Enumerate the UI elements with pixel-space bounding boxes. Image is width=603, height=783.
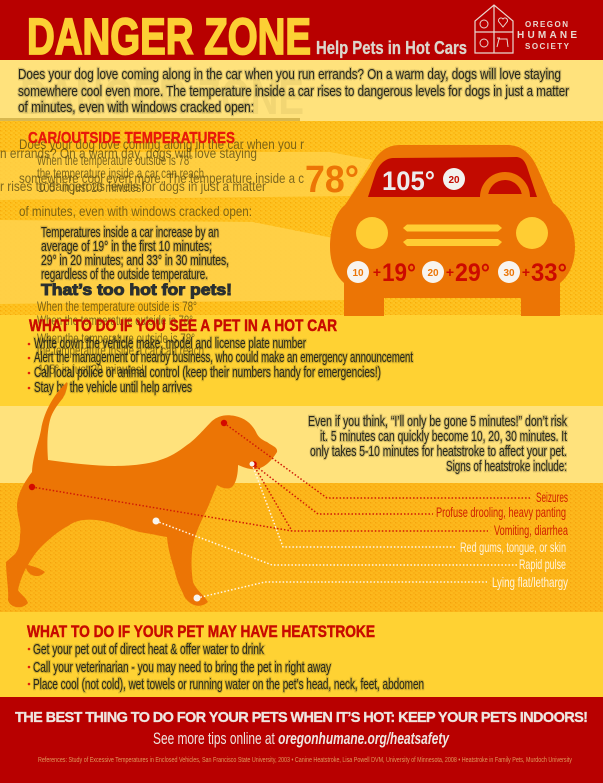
text block: temperature increase: average of 19° in the first 10 minutes; — [41, 239, 212, 255]
logo: Oregon Humane Society — [475, 5, 577, 53]
list: hot car actions: Write down the vehicle make, model and license plate number — [34, 336, 306, 352]
list: hot car actions — [28, 336, 413, 396]
list: hot car actions: Alert the management of nearby business, who could make an emergency announcement — [34, 350, 413, 366]
ghosted overlapping text: n errands? On a warm day, dogs will love staying — [0, 145, 257, 161]
labels: signs of heatstroke — [436, 489, 568, 590]
ghosted overlapping text: somewhere cool even more. The temperature inside a c — [19, 170, 304, 186]
ghosted text behind hot car section: the temperature inside a car can reach — [37, 342, 204, 358]
ghosted title in intro band: DANGER ZONE — [20, 69, 304, 125]
timer: 20 minutes on windshield — [443, 168, 465, 190]
temperature: 78 degrees outside: 78° — [305, 159, 359, 201]
timer: 10 minutes plus 19 degrees — [347, 259, 416, 287]
intro text — [18, 67, 569, 116]
text block: temperature increase — [41, 225, 232, 299]
timer: 30 minutes plus 33 degrees: 30 — [503, 268, 515, 279]
ghosted overlapping text: of minutes, even with windows cracked open: — [19, 203, 252, 219]
list: hot car actions: Stay by the vehicle until help arrives — [34, 380, 192, 396]
ghosted text behind hot car section — [37, 312, 204, 377]
labels: signs of heatstroke: Rapid pulse — [519, 556, 566, 572]
ghosted overlapping text: Does your dog love coming along in the car when you r — [19, 136, 304, 152]
ghosted overlapping text: the temperature inside a car can reach — [37, 165, 204, 181]
title: DANGER ZONE — [27, 8, 311, 65]
heading: car/outside temperatures: CAR/OUTSIDE TEMPERATURES — [28, 130, 235, 147]
ghosted text behind hot car section: When the temperature outside is 78° — [37, 312, 193, 328]
timer: 30 minutes plus 33 degrees — [498, 259, 567, 287]
ghosted overlapping text: r rises to dangerous levels for dogs in just a matter — [0, 178, 266, 194]
timer: 20 minutes plus 29 degrees: 29° — [455, 259, 490, 287]
intro text: of minutes, even with windows cracked open: — [18, 100, 254, 116]
footer banner: See more tips online at oregonhumane.org/heatsafety — [153, 729, 450, 748]
timer: 10 minutes plus 19 degrees: 10 — [352, 268, 364, 279]
list: heatstroke actions: Get your pet out of direct heat & offer water to drink — [33, 642, 265, 658]
labels: signs of heatstroke: Seizures — [536, 489, 568, 505]
list: hot car actions: Call local police or animal control (keep their numbers handy for emergencies!) — [34, 365, 381, 381]
timer: 20 minutes plus 29 degrees: 20 — [427, 268, 439, 279]
car illustration — [305, 145, 575, 316]
temperature: 105 degrees inside: 105° — [382, 166, 435, 196]
ghosted overlapping text: 105° in just 20 minutes! — [38, 179, 144, 195]
ghosted text behind hot car section: 105° in just 20 minutes! — [38, 361, 144, 377]
logo: Oregon Humane Society: SOCIETY — [525, 42, 570, 51]
dog silhouette — [6, 382, 277, 607]
title: Help Pets in Hot Cars — [316, 38, 467, 58]
list: heatstroke actions: Place cool (not cold), wet towels or running water on the pet’s head, neck, feet, abdomen — [33, 677, 424, 693]
labels: signs of heatstroke: Lying flat/lethargy — [492, 574, 568, 590]
timer: 20 minutes plus 29 degrees — [422, 259, 490, 287]
timer: 10 minutes plus 19 degrees: + — [373, 264, 381, 280]
timer: 20 minutes plus 29 degrees: + — [446, 264, 454, 280]
callout lines and dots — [29, 420, 530, 602]
text block: temperature increase: Temperatures inside a car increase by an — [41, 225, 219, 241]
text block: temperature increase: regardless of the outside temperature. — [41, 267, 208, 283]
logo: Oregon Humane Society: OREGON — [525, 20, 568, 29]
ghosted overlapping text — [0, 136, 304, 314]
list: heatstroke actions — [28, 642, 424, 693]
ghosted overlapping text: When the temperature outside is 78° — [37, 298, 197, 314]
heading: what to do if your pet may have heatstroke: WHAT TO DO IF YOUR PET MAY HAVE HEATSTROKE — [27, 622, 375, 641]
logo: Oregon Humane Society: HUMANE — [517, 30, 577, 41]
text block: temperature increase: That’s too hot for pets! — [41, 282, 232, 299]
timer: 20 minutes on windshield: 20 — [448, 175, 460, 186]
timer: 10 minutes plus 19 degrees: 19° — [382, 259, 416, 287]
footer banner — [15, 710, 588, 764]
text block: temperature increase: 29° in 20 minutes; and 33° in 30 minutes, — [41, 253, 229, 269]
list: heatstroke actions: Call your veterinarian - you may need to bring the pet in right away — [33, 660, 332, 676]
timer: 30 minutes plus 33 degrees: + — [522, 264, 530, 280]
ghosted overlapping text: When the temperature outside is 78° — [37, 152, 193, 168]
timer: 30 minutes plus 33 degrees: 33° — [531, 259, 567, 287]
heading: what to do if you see a pet in a hot car: WHAT TO DO IF YOU SEE A PET IN A HOT CAR — [29, 316, 337, 335]
ghosted text behind hot car section: When the temperature outside is 78° — [37, 330, 195, 346]
text block: heatstroke intro — [308, 414, 568, 475]
footer banner: THE BEST THING TO DO FOR YOUR PETS WHEN IT’S HOT: KEEP YOUR PETS INDOORS! — [15, 710, 588, 726]
